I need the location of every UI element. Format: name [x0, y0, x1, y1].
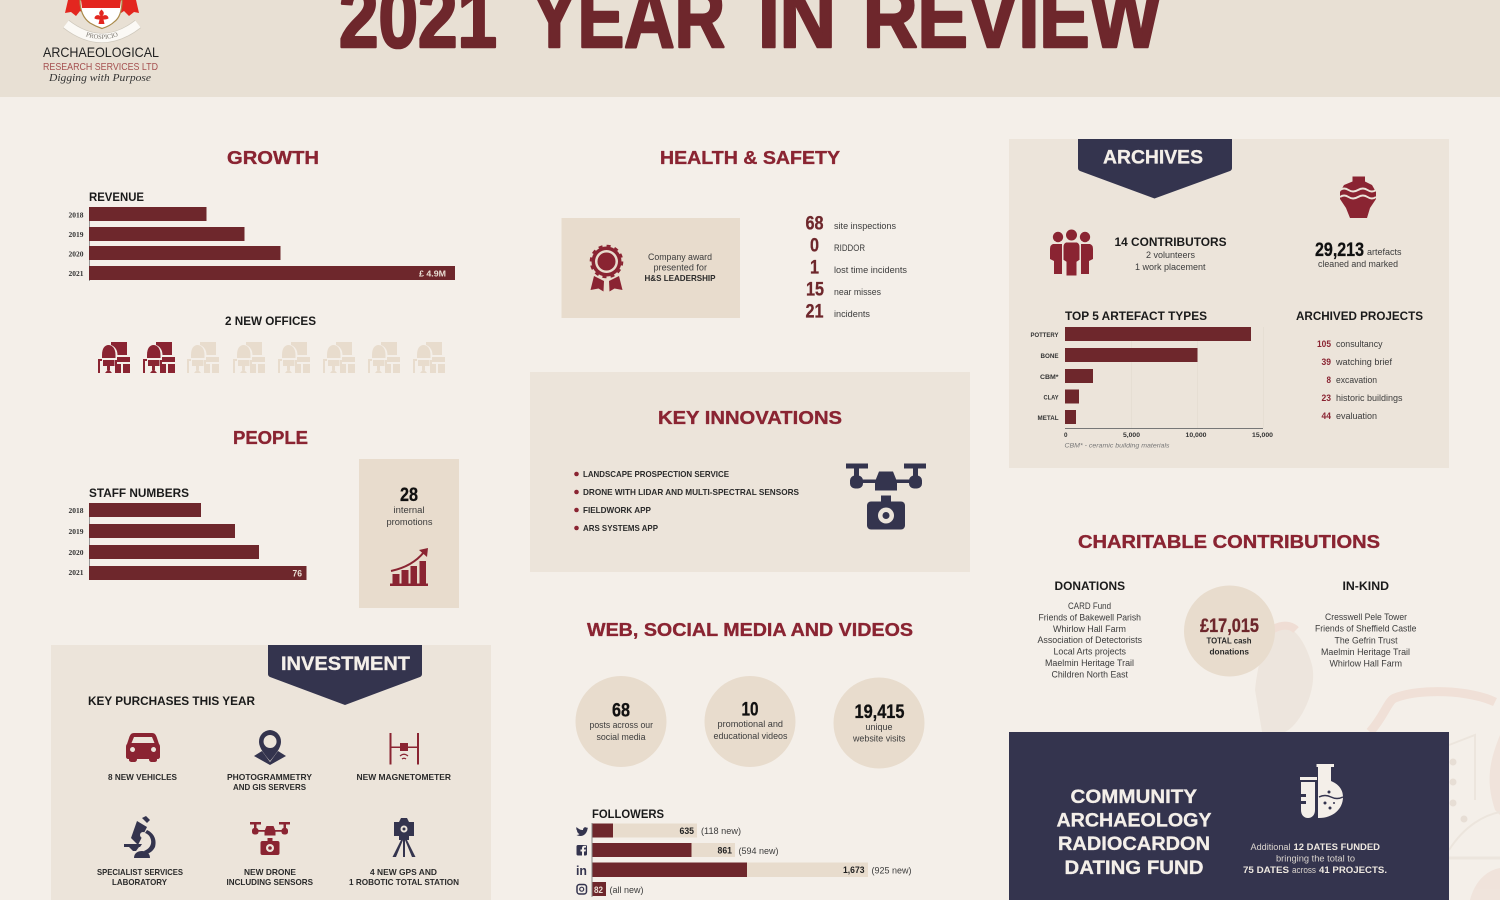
- stats: safety figures: [806, 214, 908, 322]
- stats: safety figures: near misses: [834, 287, 881, 297]
- bar chart: top 5 artefact types: BONE: [1040, 353, 1059, 360]
- stats: safety figures: 21: [806, 302, 824, 322]
- item: GPS and total station: 4 NEW GPS AND: [370, 867, 437, 877]
- bar chart: revenue: £ 4.9M: [419, 268, 446, 278]
- heading: radiocarbon fund: [1056, 787, 1212, 879]
- item: GPS and total station: [349, 818, 459, 887]
- item: new drone: [226, 822, 313, 887]
- callout: internal promotions: internal: [394, 505, 424, 515]
- panel: people: [68, 428, 459, 608]
- bar chart: followers: 861: [718, 846, 732, 856]
- banner: archives: [1078, 139, 1232, 198]
- stat circle: videos: educational videos: [714, 731, 788, 741]
- heading: key purchases: KEY PURCHASES THIS YEAR: [88, 694, 255, 708]
- heading: web and social: WEB, SOCIAL MEDIA AND VIDEOS: [587, 620, 913, 640]
- callout: internal promotions: [359, 459, 459, 608]
- callout: award: H&S LEADERSHIP: [644, 273, 716, 283]
- heading: growth: GROWTH: [227, 148, 319, 168]
- list: donations: Maelmin Heritage Trail: [1045, 658, 1134, 668]
- bar chart: revenue: REVENUE: [89, 190, 144, 204]
- icon: pottery vase: [1340, 176, 1376, 218]
- bar chart: followers: [576, 807, 912, 897]
- list: in-kind: Maelmin Heritage Trail: [1321, 647, 1410, 657]
- list: in-kind: Whirlow Hall Farm: [1330, 658, 1402, 668]
- bar chart: top 5 artefact types: TOP 5 ARTEFACT TYPES: [1065, 309, 1207, 323]
- list: archived projects: [1296, 309, 1423, 422]
- banner: archives: ARCHIVES: [1103, 148, 1203, 168]
- item: magnetometer: NEW MAGNETOMETER: [356, 772, 451, 782]
- list: archived projects: 8: [1326, 375, 1331, 386]
- stat circle: total cash donations: £17,015: [1200, 616, 1259, 637]
- bar chart: staff numbers: 2019: [68, 528, 84, 536]
- bar chart: staff numbers: 2021: [68, 569, 84, 577]
- stat circle: videos: 10: [742, 700, 758, 720]
- stat circle: posts: 68: [612, 700, 630, 722]
- text: dates funded: 12 DATES FUNDED: [1294, 842, 1381, 852]
- text: dates funded: across: [1292, 865, 1316, 875]
- icon: magnetometer: [390, 733, 419, 764]
- text: artefacts: cleaned and marked: [1318, 259, 1398, 269]
- list: donations: Friends of Bakewell Parish: [1038, 612, 1141, 622]
- list: archived projects: watching brief: [1335, 357, 1393, 367]
- item: magnetometer: [356, 733, 451, 782]
- list: donations: Local Arts projects: [1054, 646, 1126, 656]
- stats: safety figures: incidents: [834, 309, 870, 319]
- icon: twitter: [576, 827, 588, 836]
- text: contributors: 2 volunteers: [1146, 250, 1195, 260]
- list: archived projects: historic buildings: [1336, 393, 1403, 403]
- stats: safety figures: lost time incidents: [834, 265, 908, 275]
- callout: award: Company award: [648, 252, 712, 262]
- text: artefacts: artefacts: [1367, 247, 1402, 257]
- text: dates funded: 75 DATES: [1243, 865, 1289, 875]
- bar chart: staff numbers: [68, 486, 306, 580]
- stats: safety figures: 68: [806, 214, 824, 234]
- bar chart: staff numbers: 2020: [68, 549, 84, 557]
- panel: web, social media and videos: [576, 620, 924, 897]
- list: innovations: [574, 469, 799, 533]
- icon: small drone: [250, 822, 290, 855]
- panel: growth: [68, 148, 455, 373]
- stat circle: posts: posts across our: [590, 720, 653, 730]
- header band: [0, 0, 1500, 97]
- bar chart: staff numbers: 76: [292, 568, 302, 578]
- icon: drone: [846, 464, 926, 530]
- stat circle: videos: promotional and: [718, 719, 783, 729]
- text: dates funded: 41 PROJECTS.: [1319, 865, 1387, 875]
- bar chart: followers: (118 new): [701, 826, 741, 836]
- stats: safety figures: 1: [810, 258, 819, 278]
- bar chart: revenue: 2020: [68, 250, 84, 258]
- stats: safety figures: 15: [806, 280, 824, 300]
- bar chart: top 5 artefact types: 5,000: [1123, 432, 1140, 439]
- item: photogrammetry and GIS servers: PHOTOGRAMMETRY: [227, 772, 312, 782]
- panel: key innovations: [530, 372, 970, 572]
- icon: microscope: [124, 816, 156, 858]
- stat circle: website visits: website visits: [852, 734, 906, 744]
- bar chart: followers: 82: [594, 885, 603, 895]
- crest: PROSPICIO: [86, 32, 118, 39]
- bar chart: followers: 635: [680, 826, 694, 836]
- company name: [43, 44, 159, 84]
- bar chart: staff numbers: 2018: [68, 507, 84, 515]
- stats: safety figures: 0: [810, 236, 819, 256]
- icon: instagram: [577, 884, 586, 894]
- callout: internal promotions: promotions: [386, 517, 433, 527]
- text: artefacts: [1315, 240, 1402, 269]
- panel: investment: [51, 645, 491, 900]
- logo: [43, 0, 159, 84]
- stat circle: total cash donations: [1184, 586, 1275, 676]
- icon: three people: [1050, 230, 1093, 276]
- banner: investment: [268, 645, 422, 705]
- list: innovations: FIELDWORK APP: [583, 505, 651, 515]
- list: in-kind: Cresswell Pele Tower: [1325, 612, 1407, 622]
- bar chart: top 5 artefact types: 15,000: [1252, 432, 1273, 439]
- heading: radiocarbon fund: RADIOCARDON: [1058, 834, 1210, 855]
- stats: safety figures: site inspections: [834, 221, 896, 231]
- heading: people: PEOPLE: [233, 428, 308, 448]
- callout: award: presented for: [654, 262, 707, 272]
- bar chart: top 5 artefact types: 0: [1064, 432, 1068, 439]
- bar chart: top 5 artefact types: CBM* - ceramic building materials: [1064, 442, 1170, 450]
- item: vehicles: 8 NEW VEHICLES: [108, 772, 177, 782]
- icon: facebook: [576, 845, 587, 856]
- panel: archives: [1009, 139, 1449, 468]
- bar chart: followers: (594 new): [738, 846, 778, 856]
- item: laboratory: SPECIALIST SERVICES: [97, 867, 183, 877]
- icon: linkedin: in: [576, 863, 587, 878]
- list: donations: DONATIONS: [1054, 579, 1125, 593]
- panel: radiocarbon dating fund: [1009, 732, 1449, 900]
- bar chart: top 5 artefact types: [1030, 309, 1273, 450]
- watermark illustration: [1255, 626, 1500, 900]
- bar chart: top 5 artefact types: CLAY: [1044, 394, 1059, 402]
- icon: growth chart: [390, 548, 428, 586]
- bar chart: staff numbers: STAFF NUMBERS: [89, 486, 189, 500]
- list: archived projects: 105: [1317, 339, 1332, 350]
- list: archived projects: excavation: [1336, 375, 1377, 385]
- list: innovations: ARS SYSTEMS APP: [583, 523, 658, 533]
- stat circle: website visits: [834, 678, 924, 768]
- bar chart: followers: (925 new): [872, 866, 912, 876]
- list: innovations: DRONE WITH LIDAR AND MULTI-SPECTRAL SENSORS: [583, 487, 799, 497]
- stat circle: posts: social media: [596, 732, 646, 742]
- company name: RESEARCH SERVICES LTD: [43, 61, 158, 73]
- text: dates funded: bringing the total to: [1276, 854, 1355, 864]
- bar chart: top 5 artefact types: 10,000: [1186, 432, 1207, 439]
- heading: radiocarbon fund: COMMUNITY: [1070, 787, 1197, 808]
- list: innovations: LANDSCAPE PROSPECTION SERVICE: [583, 469, 729, 479]
- list: in-kind: Friends of Sheffield Castle: [1315, 624, 1416, 634]
- banner: investment: INVESTMENT: [281, 654, 410, 675]
- item: photogrammetry and GIS servers: [227, 730, 312, 792]
- icon: camera on tripod: [392, 818, 416, 857]
- bar chart: revenue: [68, 190, 455, 281]
- text: dates funded: [1243, 842, 1387, 875]
- heading: charitable contributions: CHARITABLE CONTRIBUTIONS: [1078, 532, 1380, 552]
- list: donations: Children North East: [1052, 670, 1128, 680]
- item: new drone: INCLUDING SENSORS: [226, 877, 313, 887]
- panel: health and safety: [562, 148, 908, 322]
- item: GPS and total station: 1 ROBOTIC TOTAL STATION: [349, 877, 459, 887]
- list: donations: Whirlow Hall Farm: [1053, 624, 1126, 634]
- company name: Digging with Purpose: [48, 73, 152, 84]
- text: contributors: 14 CONTRIBUTORS: [1114, 235, 1226, 249]
- bar chart: revenue: 2019: [68, 231, 84, 239]
- stat circle: website visits: unique: [866, 722, 892, 732]
- list: in-kind: The Gefrin Trust: [1334, 636, 1398, 646]
- heading: health and safety: HEALTH & SAFETY: [660, 148, 840, 168]
- list: in-kind: IN-KIND: [1342, 579, 1389, 593]
- list: donations: [1038, 579, 1142, 680]
- bar chart: top 5 artefact types: METAL: [1038, 415, 1059, 422]
- bar chart: top 5 artefact types: POTTERY: [1030, 332, 1059, 339]
- stat circle: videos: [704, 676, 796, 767]
- bar chart: followers: FOLLOWERS: [592, 807, 664, 821]
- bar chart: top 5 artefact types: CBM*: [1040, 374, 1059, 381]
- list: archived projects: consultancy: [1336, 339, 1383, 349]
- callout: internal promotions: 28: [400, 485, 418, 506]
- bar chart: followers: 1,673: [843, 865, 864, 875]
- bar chart: revenue: 2021: [68, 270, 84, 278]
- icon: map pin: [254, 730, 286, 765]
- list: archived projects: evaluation: [1336, 411, 1377, 421]
- text: contributors: [1114, 235, 1226, 272]
- bar chart: followers: (all new): [610, 885, 644, 895]
- stat circle: total cash donations: TOTAL cash: [1206, 636, 1252, 646]
- list: archived projects: 23: [1322, 393, 1331, 404]
- bar chart: revenue: 2018: [68, 212, 84, 220]
- list: donations: Association of Detectorists: [1038, 635, 1142, 645]
- heading: key innovations: KEY INNOVATIONS: [658, 408, 842, 428]
- item: vehicles: [108, 733, 177, 782]
- panel: charitable contributions: [1038, 532, 1416, 680]
- stat circle: website visits: 19,415: [854, 702, 905, 723]
- item: laboratory: [97, 816, 183, 887]
- list: donations: CARD Fund: [1068, 601, 1111, 611]
- stats: safety figures: RIDDOR: [834, 243, 865, 253]
- icon: car: [126, 733, 160, 762]
- stat circle: posts: [576, 676, 666, 767]
- icon: award rosette: [590, 246, 622, 292]
- list: archived projects: 44: [1322, 411, 1332, 422]
- item: laboratory: LABORATORY: [112, 877, 167, 887]
- company name: ARCHAEOLOGICAL: [43, 44, 159, 60]
- text: contributors: 1 work placement: [1135, 262, 1206, 272]
- list: archived projects: ARCHIVED PROJECTS: [1296, 309, 1423, 323]
- item: new drone: NEW DRONE: [244, 867, 296, 877]
- list: archived projects: 39: [1322, 357, 1331, 368]
- stat circle: total cash donations: donations: [1210, 646, 1249, 656]
- text: artefacts: 29,213: [1315, 240, 1364, 261]
- heading: new offices: 2 NEW OFFICES: [225, 314, 316, 328]
- title: [339, 0, 1162, 66]
- list: in-kind: [1315, 579, 1416, 668]
- item: photogrammetry and GIS servers: AND GIS SERVERS: [233, 782, 306, 792]
- text: dates funded: Additional: [1250, 842, 1290, 852]
- icons: office pictogram row: [98, 342, 445, 373]
- icon: flasks: [1300, 764, 1343, 818]
- callout: award: [562, 218, 740, 318]
- heading: radiocarbon fund: ARCHAEOLOGY: [1056, 810, 1212, 832]
- heading: radiocarbon fund: DATING FUND: [1064, 858, 1204, 879]
